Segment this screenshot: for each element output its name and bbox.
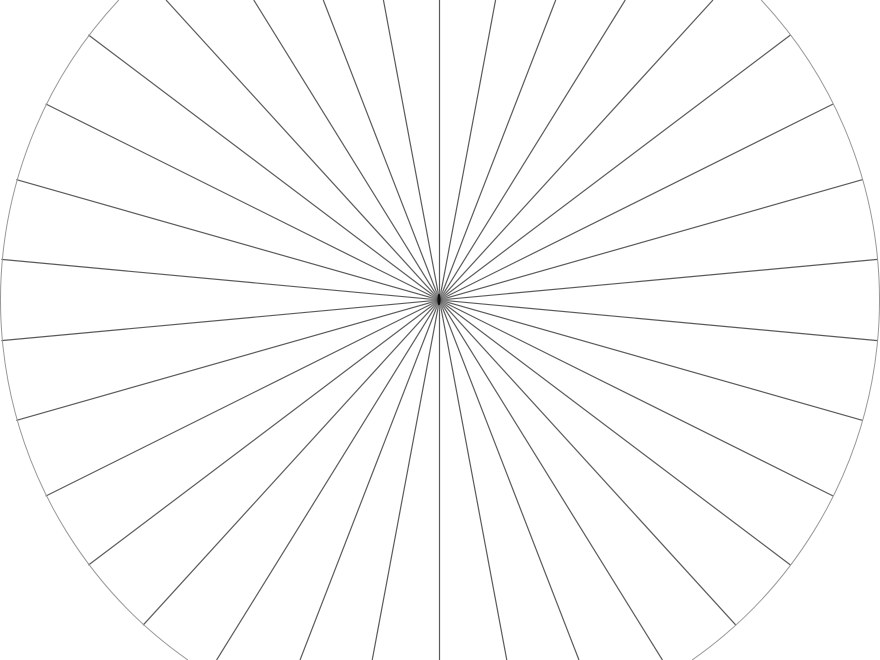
centre hub (429, 289, 449, 311)
